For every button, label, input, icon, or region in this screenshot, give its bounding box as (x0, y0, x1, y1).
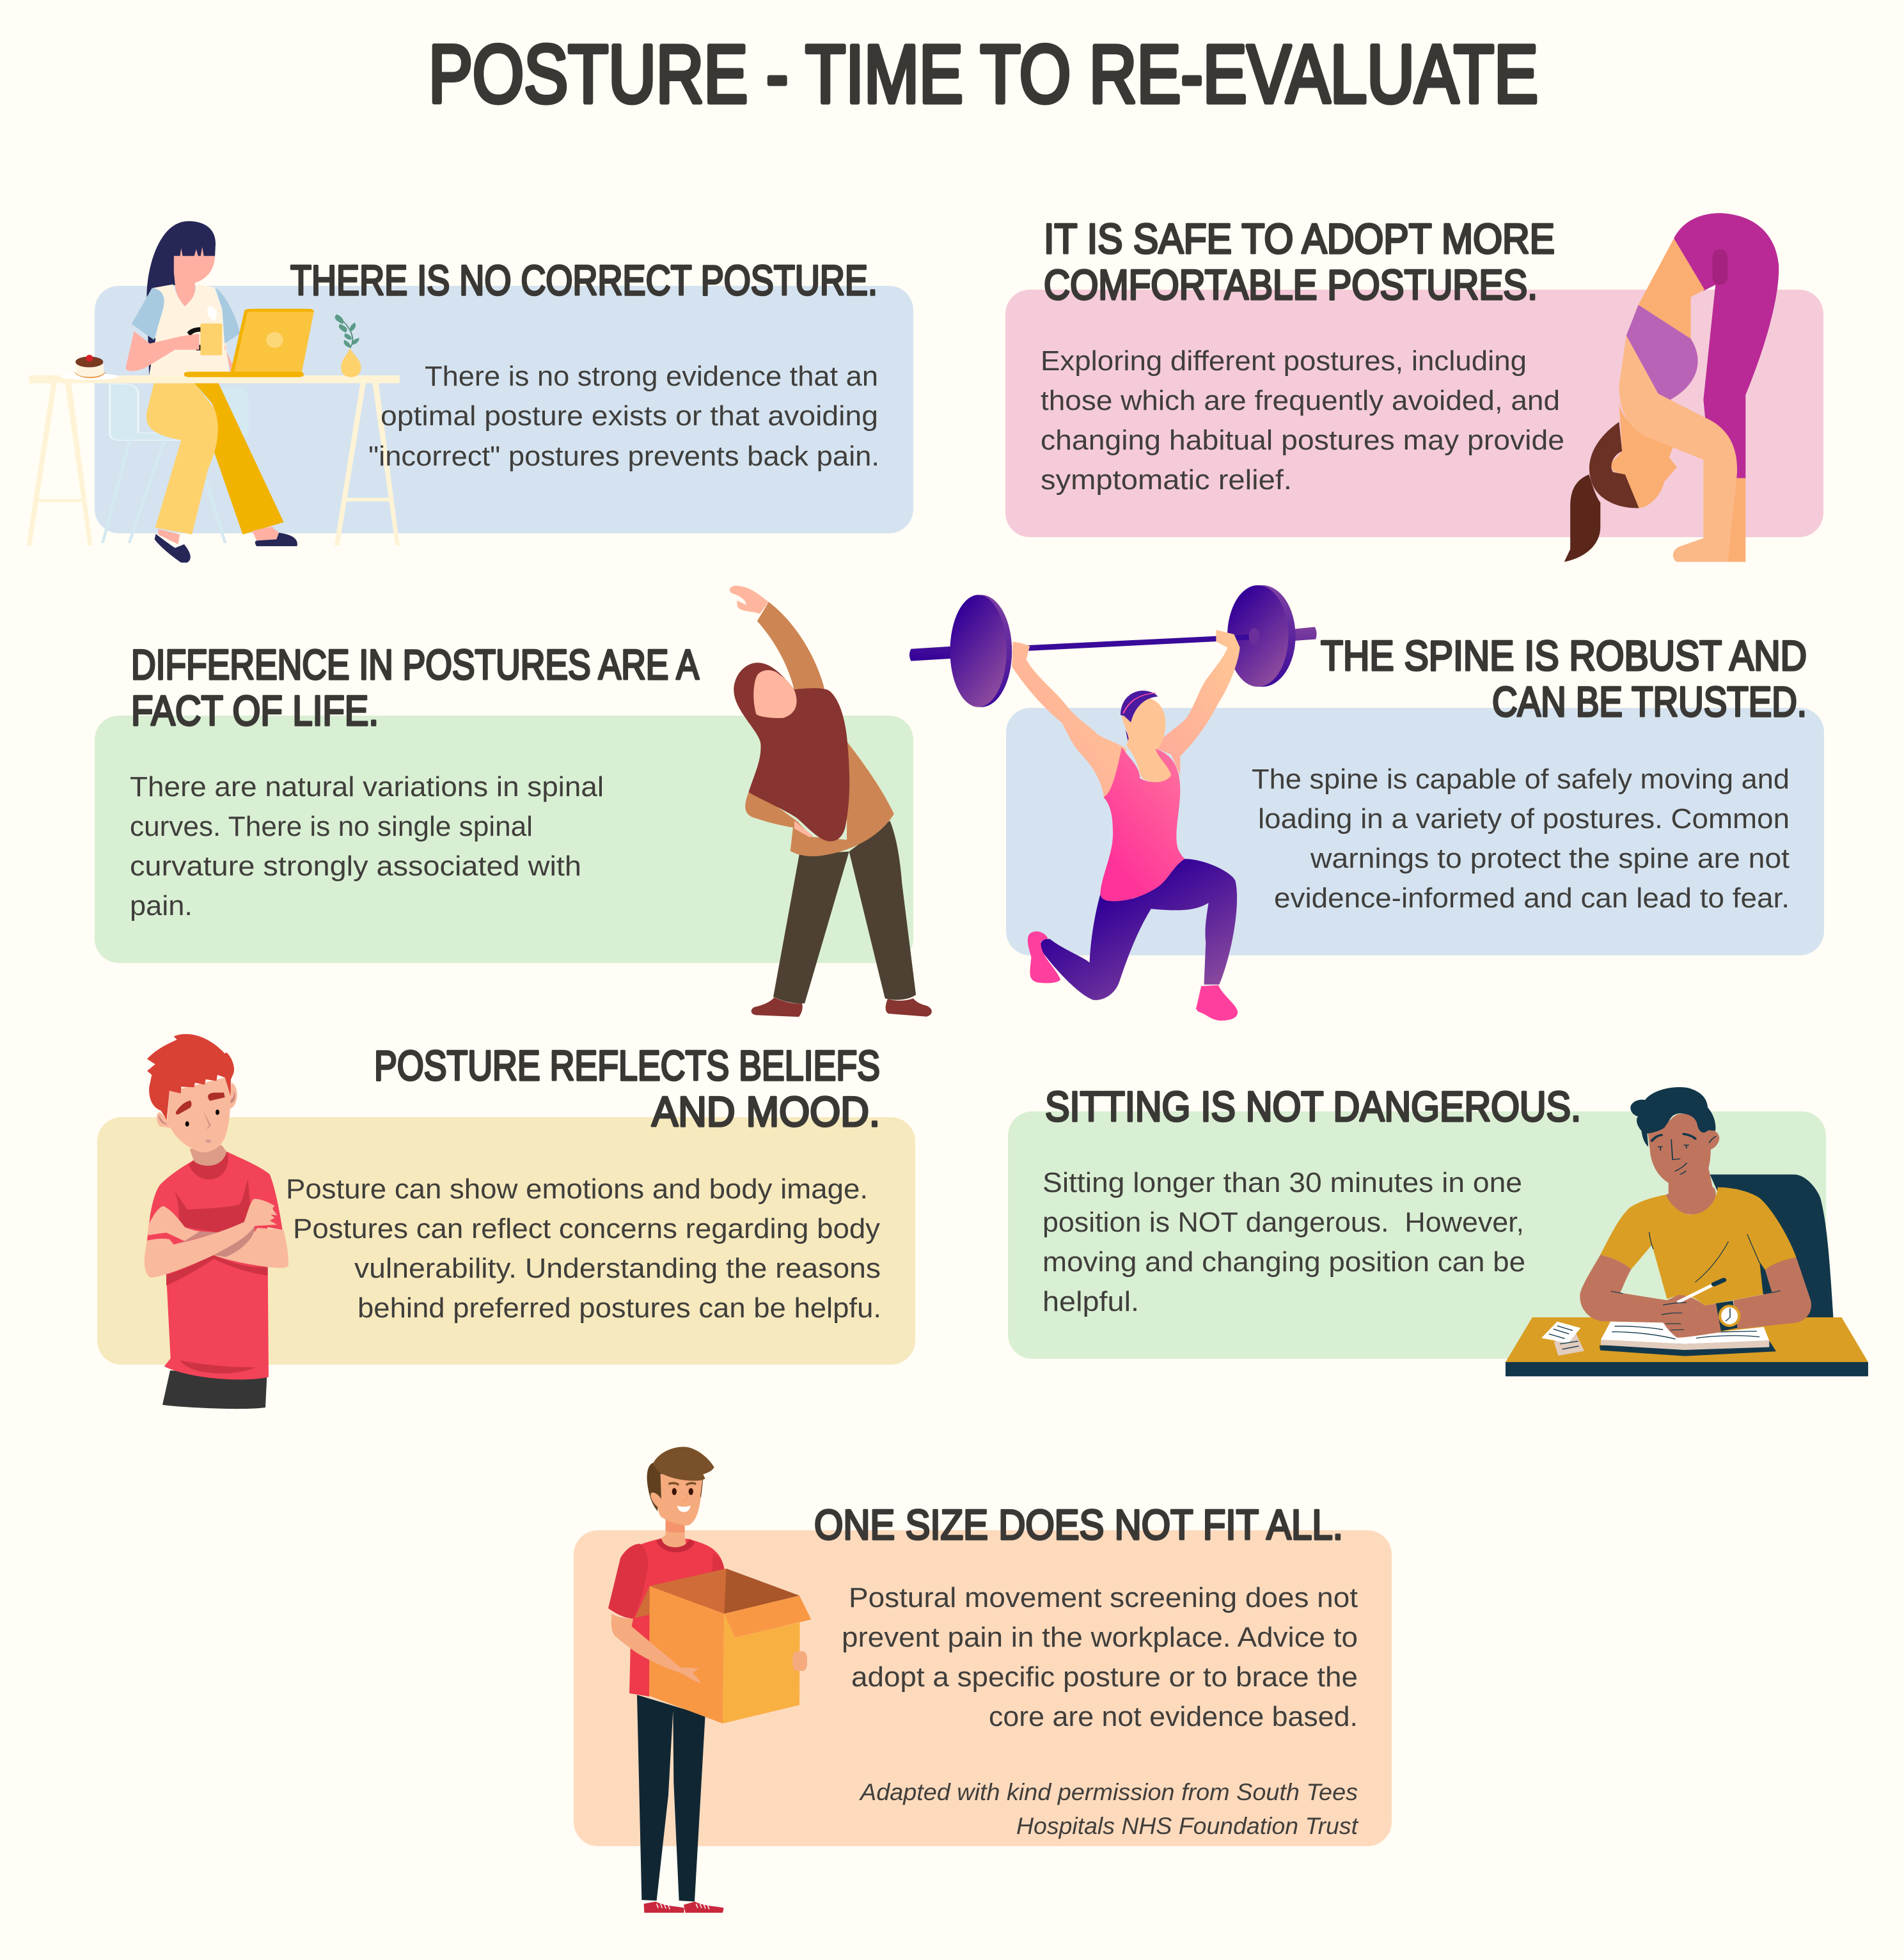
body text: vulnerability. Understanding the reasons (354, 1253, 881, 1284)
body text: optimal posture exists or that avoiding (381, 400, 878, 432)
heading: DIFFERENCE IN POSTURES ARE A (131, 641, 699, 688)
panel: there is no correct posture (27, 221, 913, 563)
illustration: woman in hijab side bending (730, 586, 932, 1017)
panel: safe to adopt comfortable postures (1005, 213, 1823, 562)
heading (1044, 215, 1555, 308)
panel background pink (1005, 290, 1823, 537)
panel background blue (1006, 708, 1824, 955)
panel background green (95, 716, 913, 963)
heading (374, 1042, 880, 1135)
body text (368, 361, 879, 472)
body text: position is NOT dangerous. However, (1042, 1207, 1524, 1238)
body text: Exploring different postures, including (1041, 345, 1527, 377)
body text: moving and changing position can be (1042, 1246, 1525, 1278)
body text: adopt a specific posture or to brace the (851, 1661, 1358, 1693)
attribution note (859, 1779, 1359, 1839)
body text: Posture can show emotions and body image. (286, 1173, 868, 1205)
heading: THERE IS NO CORRECT POSTURE. (290, 256, 877, 304)
body text: warnings to protect the spine are not (1310, 843, 1790, 874)
body text: There are natural variations in spinal (130, 771, 604, 803)
heading: SITTING IS NOT DANGEROUS. (1045, 1083, 1581, 1130)
body text: Postures can reflect concerns regarding body (293, 1213, 880, 1244)
body text (1041, 345, 1564, 496)
body text: those which are frequently avoided, and (1041, 385, 1560, 416)
illustration: man carrying a cardboard box (608, 1447, 811, 1913)
illustration: woman at desk with laptop (27, 221, 400, 563)
heading: AND MOOD. (652, 1088, 880, 1135)
heading: COMFORTABLE POSTURES. (1044, 261, 1538, 308)
body text (286, 1173, 881, 1324)
panel background peach (574, 1530, 1392, 1846)
body text: curves. There is no single spinal (130, 811, 533, 842)
heading: FACT OF LIFE. (131, 687, 379, 734)
panel background blue (95, 286, 913, 533)
title: POSTURE - TIME TO RE-EVALUATE (429, 29, 1538, 120)
attribution note: Hospitals NHS Foundation Trust (1016, 1813, 1359, 1839)
body text: The spine is capable of safely moving and (1252, 764, 1790, 795)
panel background yellow (97, 1117, 915, 1365)
body text: behind preferred postures can be helpfu. (358, 1292, 881, 1324)
body text: changing habitual postures may provide (1041, 425, 1564, 456)
body text: There is no strong evidence that an (425, 361, 878, 392)
heading (1321, 632, 1807, 725)
heading: IT IS SAFE TO ADOPT MORE (1044, 215, 1555, 262)
body text: symptomatic relief. (1041, 464, 1292, 496)
illustration: red-haired man with crossed arms (145, 1034, 288, 1409)
heading (131, 641, 699, 734)
heading: ONE SIZE DOES NOT FIT ALL. (814, 1501, 1343, 1548)
attribution note: Adapted with kind permission from South Tees (859, 1779, 1358, 1805)
body text (1042, 1167, 1525, 1317)
heading: POSTURE REFLECTS BELIEFS (374, 1042, 880, 1089)
heading: CAN BE TRUSTED. (1492, 678, 1807, 725)
body text (1252, 764, 1790, 914)
panel background green (1008, 1111, 1826, 1359)
illustration: woman lifting barbell (909, 585, 1317, 1021)
body text: helpful. (1042, 1286, 1139, 1317)
body text: "incorrect" postures prevents back pain. (368, 441, 879, 472)
panel: sitting is not dangerous (1008, 1083, 1868, 1376)
body text: Postural movement screening does not (849, 1582, 1358, 1613)
body text (842, 1582, 1358, 1732)
body text: prevent pain in the workplace. Advice to (842, 1622, 1358, 1653)
panel: one size does not fit all (574, 1447, 1392, 1913)
body text: pain. (130, 890, 193, 921)
body text: loading in a variety of postures. Common (1258, 803, 1790, 835)
panel: the spine is robust (909, 585, 1824, 1021)
illustration: man writing at desk (1506, 1087, 1868, 1376)
body text: core are not evidence based. (989, 1701, 1358, 1732)
body text (130, 771, 604, 921)
illustration: woman in forward fold (1564, 213, 1779, 562)
body text: curvature strongly associated with (130, 851, 581, 882)
body text: evidence-informed and can lead to fear. (1274, 882, 1790, 914)
heading: THE SPINE IS ROBUST AND (1321, 632, 1807, 679)
body text: Sitting longer than 30 minutes in one (1042, 1167, 1522, 1198)
panel: posture reflects beliefs and mood (97, 1034, 915, 1409)
panel: difference in postures (95, 586, 932, 1017)
